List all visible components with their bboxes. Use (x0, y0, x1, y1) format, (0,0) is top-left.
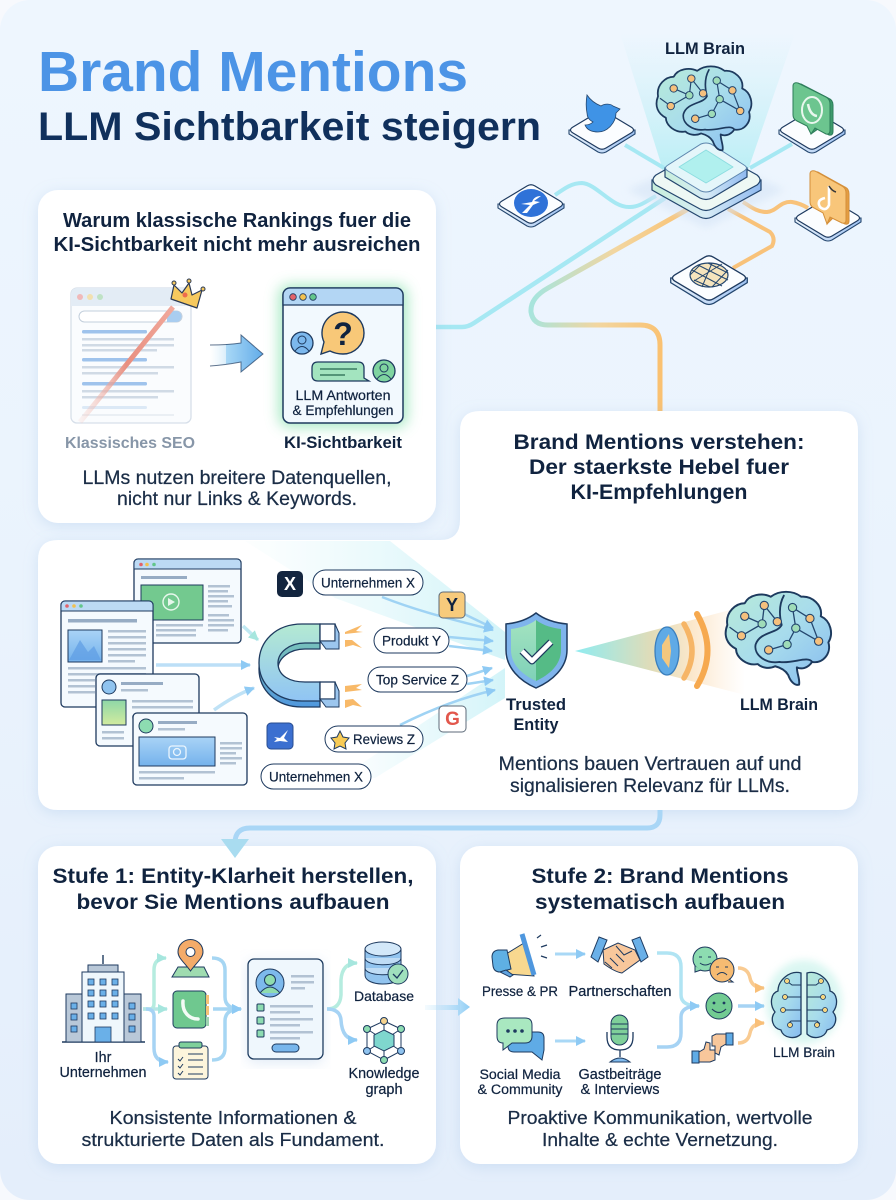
body text: Proaktive Kommunikation, wertvolle (508, 1107, 812, 1128)
icon: microphone (607, 1015, 633, 1062)
body text: signalisieren Relevanz für LLMs. (510, 776, 790, 797)
arrow (210, 335, 263, 372)
arrow: stage 1 to stage 2 (425, 998, 470, 1016)
light beam (620, 33, 795, 170)
heading: KI-Empfehlungen (570, 480, 748, 504)
icon: symmetric brain (766, 960, 842, 1044)
label: Ihr Unternehmen: Unternehmen (60, 1065, 147, 1081)
heading: Warum klassische Rankings fuer die (63, 209, 411, 232)
label: Trusted Entity: Entity (514, 716, 559, 734)
chip: Unternehmen X lower (261, 764, 371, 789)
chip: X: X (284, 574, 296, 594)
body text: LLMs nutzen breitere Datenquellen, (82, 468, 392, 489)
icon: Facebook tile (498, 185, 564, 227)
heading: KI-Sichtbarkeit nicht mehr ausreichen (54, 233, 420, 256)
heading: Stufe 2: Brand Mentions (532, 864, 789, 888)
icon: knowledge graph (364, 1018, 404, 1064)
window text (292, 387, 394, 418)
icon: database (365, 942, 408, 984)
label: Knowledge graph: graph (366, 1082, 403, 1098)
label: Ihr Unternehmen (60, 1050, 147, 1081)
center arrows (212, 958, 241, 1060)
chip: Y (439, 592, 465, 618)
chip: Reviews Z: Reviews Z (353, 731, 415, 747)
icon: map pin (172, 939, 209, 977)
answer bubble (312, 362, 369, 381)
label: Gastbeiträge & Interviews: Gastbeiträge (578, 1067, 662, 1083)
icon: sparks (345, 625, 363, 708)
title line 1: Brand Mentions (38, 40, 468, 104)
output arrows (738, 968, 764, 1043)
heading (532, 864, 789, 914)
icon: brain (726, 592, 831, 685)
body text: Inhalte & echte Vernetzung. (542, 1129, 778, 1150)
chip: Top Service Z (368, 667, 467, 692)
body text: strukturierte Daten als Fundament. (82, 1129, 384, 1150)
body text: nicht nur Links & Keywords. (117, 489, 357, 510)
icon: question bubble (321, 312, 364, 354)
icon: phone book (173, 991, 209, 1028)
panel: stage 1 (38, 846, 436, 1164)
heading (514, 430, 804, 504)
heading (54, 209, 420, 256)
source window: photo post (133, 713, 247, 785)
icon: WhatsApp tile (779, 83, 845, 153)
label: Database: Database (354, 988, 414, 1004)
converging rays (245, 541, 505, 778)
icon: Twitter tile (569, 95, 635, 153)
icon: sentiment bubbles (693, 947, 734, 1019)
brain (657, 66, 751, 150)
arrow (555, 1040, 585, 1042)
panel: stage 2 (460, 846, 858, 1164)
assistant avatar (373, 360, 395, 382)
hub platform (627, 143, 785, 228)
label: Knowledge graph: Knowledge (348, 1066, 420, 1082)
chip: Reviews Z (325, 726, 423, 752)
network links (555, 144, 808, 268)
body text (498, 754, 802, 797)
source window: video (134, 559, 241, 643)
body text (508, 1107, 812, 1150)
icon: thumbs (692, 1033, 733, 1063)
panel: brand mentions (38, 411, 858, 810)
label: Trusted Entity (506, 696, 566, 734)
source window: social post (96, 674, 199, 746)
heading: Stufe 1: Entity-Klarheit herstellen, (52, 864, 414, 888)
heading: bevor Sie Mentions aufbauen (76, 890, 390, 914)
title (38, 40, 541, 149)
chip: Unternehmen X: Unternehmen X (321, 574, 416, 590)
label: AI visibility: KI-Sichtbarkeit (284, 433, 402, 452)
icon: question bubble: ? (333, 316, 353, 352)
signal cone (575, 606, 745, 695)
icon: crown (171, 279, 205, 308)
label: Social Media & Community: Social Media (480, 1067, 561, 1083)
heading (52, 864, 414, 914)
body text: Konsistente Informationen & (110, 1107, 357, 1128)
connector: cyan line from panel 1 to hub (432, 198, 665, 327)
window text: LLM Antworten (296, 387, 390, 403)
icon: TikTok tile (795, 171, 861, 241)
label: Gastbeiträge & Interviews (578, 1067, 662, 1098)
right fork arrows (327, 963, 357, 1040)
label: Knowledge graph (348, 1066, 420, 1098)
icon: shield (506, 613, 567, 688)
label: Gastbeiträge & Interviews: & Interviews (580, 1082, 660, 1098)
chip: Top Service Z: Top Service Z (376, 672, 459, 688)
left bracket arrows (143, 958, 168, 1062)
label: Presse & PR: Presse & PR (482, 983, 558, 999)
chip: Produkt Y: Produkt Y (382, 632, 442, 648)
label: LLM Brain (665, 40, 745, 58)
icon: web globe tile (671, 256, 747, 304)
icon: building (62, 955, 145, 1042)
icon: speaker (655, 614, 708, 686)
label: LLM Brain: LLM Brain (773, 1044, 835, 1060)
merge arrows (657, 953, 699, 1047)
icon: megaphone (492, 934, 547, 977)
label: Trusted Entity: Trusted (506, 696, 566, 714)
icon: clipboard (173, 1042, 208, 1079)
title line 2: LLM Sichtbarkeit steigern (38, 105, 541, 149)
label: LLM Brain: LLM Brain (740, 696, 818, 714)
icon: magnet (259, 624, 339, 707)
chip: Y: Y (446, 595, 458, 615)
isometric LLM hub network (498, 33, 861, 304)
chip: Produkt Y (374, 628, 449, 653)
label: Ihr Unternehmen: Ihr (95, 1050, 112, 1066)
arrows into magnet (156, 626, 258, 710)
chip: Unternehmen X lower: Unternehmen X (269, 768, 364, 784)
window text: & Empfehlungen (292, 402, 394, 418)
mention arrows (382, 597, 495, 725)
icon: chat bubbles (497, 1018, 544, 1060)
label: classic SEO: Klassisches SEO (65, 435, 195, 452)
chip: Google (439, 706, 466, 732)
chip: X (277, 571, 303, 597)
source window: article (61, 601, 153, 707)
heading: Brand Mentions verstehen: (514, 430, 804, 454)
label: Social Media & Community (478, 1067, 563, 1098)
profile card (248, 959, 323, 1059)
chip: blue bird (267, 723, 293, 749)
chip: Google: G (445, 709, 460, 730)
user avatar (291, 332, 313, 354)
icon: handshake (591, 937, 648, 973)
red strike (80, 307, 173, 422)
AI answers window (279, 285, 407, 427)
body text (82, 1107, 384, 1150)
label: Social Media & Community: & Community (478, 1082, 563, 1098)
chip: Unternehmen X (313, 570, 423, 595)
label: Partnerschaften: Partnerschaften (568, 984, 672, 1000)
connector: panel 2 to stage 1 (221, 810, 660, 858)
heading: Der staerkste Hebel fuer (529, 455, 790, 479)
heading: systematisch aufbauen (535, 890, 785, 914)
body text: Mentions bauen Vertrauen auf und (498, 754, 802, 775)
panel: why classic rankings (38, 190, 436, 523)
connector: orange-green line from hub to panel 2 (531, 208, 690, 414)
arrow (555, 952, 585, 956)
faded SEO window (71, 279, 205, 423)
body text (82, 468, 392, 510)
